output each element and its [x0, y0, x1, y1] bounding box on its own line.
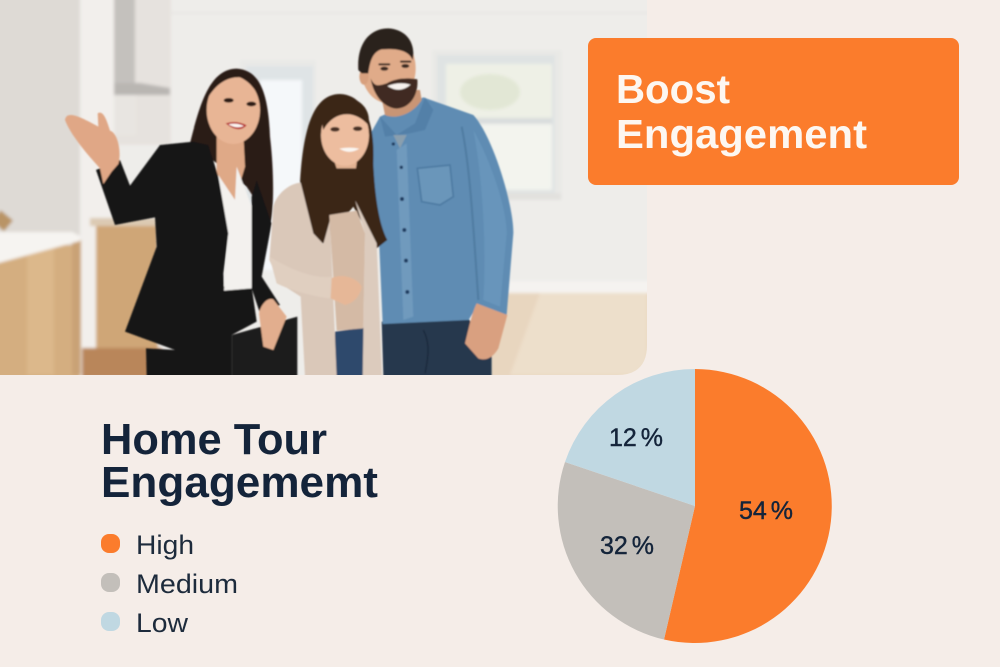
slice labels [600, 424, 793, 560]
callout heading: Boost [616, 66, 730, 112]
callout: Boost Engagement [588, 38, 959, 185]
slice labels: 54 % [739, 497, 793, 525]
legend [101, 530, 238, 638]
heading: Home Tour Engagement: Home Tour [101, 415, 327, 464]
pie chart [558, 369, 832, 643]
callout: Boost Engagement: Engagement [616, 111, 867, 157]
slice: Medium 32% [558, 462, 695, 640]
agent woman [65, 69, 297, 377]
legend item: Low: Low [136, 608, 189, 638]
slice: Low 12% [565, 369, 695, 506]
heading: Home Tour Engagement [101, 415, 378, 507]
legend item: High: High [136, 530, 194, 560]
slice: High 54% [664, 369, 832, 643]
photo: agent showing a home to a couple [0, 0, 655, 380]
room background [0, 0, 655, 380]
people [65, 28, 513, 377]
man [358, 28, 513, 377]
woman in cardigan [269, 94, 387, 377]
slice labels: 32 % [600, 532, 654, 560]
legend item: Medium: Medium [136, 569, 238, 599]
slice labels: 12 % [609, 424, 663, 452]
heading: Home Tour Engagement: Engagememt [101, 458, 378, 507]
